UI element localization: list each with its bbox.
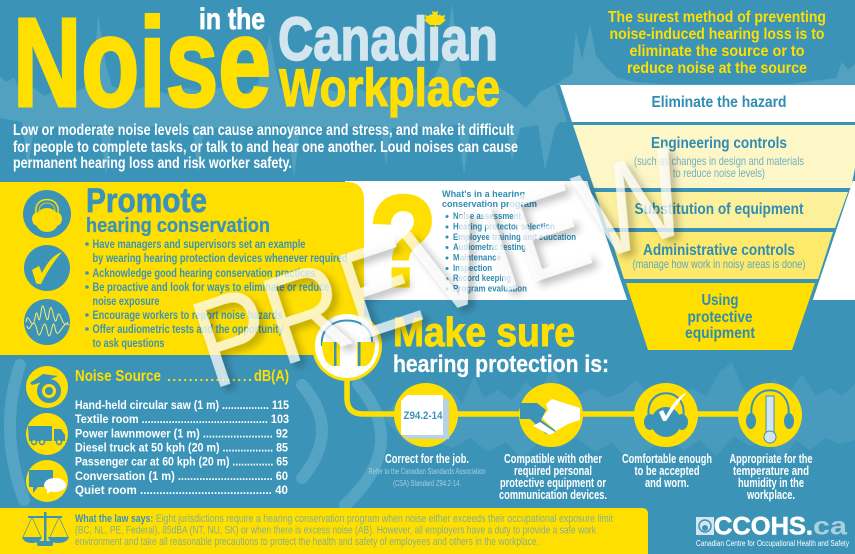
item: appropriate <box>730 383 812 502</box>
item: compatible: required personal <box>514 464 592 478</box>
text block: what's in a hearing conservation program: Employee training and education <box>453 232 576 243</box>
icon: head with earmuffs <box>23 190 71 238</box>
table header <box>75 368 289 385</box>
item: correct for the job <box>368 383 486 488</box>
panel: what the law says <box>0 508 648 554</box>
callout: surest method: reduce noise at the source <box>627 60 807 77</box>
callout: surest method: eliminate the source or to <box>630 43 804 60</box>
funnel level: engineering <box>573 125 855 188</box>
panel: promote hearing conservation <box>0 182 364 355</box>
bullet list: promote actions: Have managers and supervisors set an example <box>92 237 306 251</box>
text block: what's in a hearing conservation program: Hearing protector selection <box>453 222 555 232</box>
table header: Noise Source <box>75 368 161 385</box>
funnel level: engineering: Engineering controls <box>651 135 787 152</box>
intro paragraph: Low or moderate noise levels can cause annoyance and stress, and make it difficult <box>13 122 514 139</box>
callout: surest method: noise-induced hearing loss is to <box>610 26 824 43</box>
funnel level: substitution <box>595 192 848 228</box>
item: compatible: protective equipment or <box>500 476 606 490</box>
law text: What the law says: Eight jurisdictions require a hearing conservation program when noise either exceeds their occupational exposure limit <box>75 513 613 525</box>
text block: what's in a hearing conservation program: What's in a hearing <box>442 189 525 200</box>
title word: Canadian: Canadian <box>278 5 498 73</box>
text block: what's in a hearing conservation program <box>442 189 576 294</box>
item: correct for the job: Z94.2-14 <box>404 410 443 422</box>
icon: dump truck <box>26 413 68 455</box>
item: appropriate: humidity in the <box>738 476 804 490</box>
subheading: hearing protection is: hearing protection is: <box>393 351 609 378</box>
item: correct for the job: Refer to the Canadian Standards Association <box>368 467 486 476</box>
bullet list: promote actions: to ask questions <box>92 336 165 350</box>
table rows <box>75 399 290 497</box>
intro paragraph: for people to complete tasks, or talk to and hear one another. Loud noises can cause <box>13 139 518 156</box>
text block: what's in a hearing conservation program: Maintenance <box>453 252 501 264</box>
panel: funnel of controls <box>560 85 855 350</box>
table rows: Power lawnmower (1 m) ....................... 92 <box>75 428 288 440</box>
icon: noise waveform <box>24 299 70 345</box>
law text <box>75 513 613 548</box>
heading: Promote: Promote <box>86 182 207 220</box>
item: correct for the job: (CSA) Standard Z94.2-14. <box>393 479 461 488</box>
funnel level: protective equipment: protective <box>688 309 753 326</box>
funnel level: substitution: Substitution of equipment <box>634 201 804 218</box>
table header: ................ <box>167 368 252 384</box>
bullet list: promote actions: noise exposure <box>92 294 160 308</box>
heading: Make sure: Make sure <box>393 309 575 355</box>
table rows: Quiet room ......................................... 40 <box>75 484 288 497</box>
law text: (BC, NL, PE, Federal), 85dBA (NT, NU, SK) or when there is excess noise (AB). However, all employers have a duty to provide a safe work <box>75 524 596 536</box>
icon: question mark: ? <box>369 168 437 314</box>
panel: program white background <box>345 181 855 300</box>
funnel level: eliminate <box>560 85 855 122</box>
text block: what's in a hearing conservation program: conservation program <box>442 199 537 210</box>
text block: what's in a hearing conservation program: Inspection <box>453 263 492 274</box>
logo: CCOHS: CCOHS. <box>714 512 813 540</box>
title word: Workplace: Workplace <box>279 59 500 118</box>
title words: in the: in the <box>199 3 265 36</box>
table rows: Passenger car at 60 kph (20 m) .............. 65 <box>75 456 288 468</box>
text block: what's in a hearing conservation program: Record keeping <box>453 273 511 284</box>
item: comfortable <box>622 383 712 490</box>
table rows: Textile room .......................................... 103 <box>75 413 290 426</box>
item: appropriate: workplace. <box>746 488 795 502</box>
item: appropriate: Appropriate for the <box>730 452 812 466</box>
intro paragraph: permanent hearing loss and risk worker safety. <box>13 155 292 172</box>
item: compatible: communication devices. <box>499 488 607 502</box>
text block: what's in a hearing conservation program: Audiometric testing <box>453 242 526 253</box>
item: comfortable: to be accepted <box>634 464 700 478</box>
connector line <box>347 375 770 414</box>
table rows: Conversation (1 m) ............................... 60 <box>75 470 288 483</box>
law text: environment and take all reasonable precautions to protect the health and safety of employees and others in the workplace. <box>75 536 539 548</box>
item: compatible <box>499 383 607 502</box>
funnel level: administrative <box>609 232 833 279</box>
bullet list: promote actions <box>85 237 347 350</box>
funnel level: protective equipment <box>626 283 815 350</box>
funnel level: protective equipment: equipment <box>685 325 755 342</box>
icon: maple leaf <box>424 8 446 29</box>
callout: surest method: The surest method of preventing <box>608 9 826 26</box>
item: comfortable: Comfortable enough <box>622 452 712 466</box>
watermark: PREVIEW: PREVIEW <box>176 120 704 416</box>
table rows: Diesel truck at 50 kph (20 m) ................. 85 <box>75 442 288 454</box>
icon: check mark <box>24 245 70 291</box>
funnel level: eliminate: Eliminate the hazard <box>652 94 786 111</box>
icon: scales of justice <box>22 512 69 546</box>
item: appropriate: temperature and <box>733 464 809 478</box>
logo: CCOHS: ca <box>813 512 848 540</box>
text block: what's in a hearing conservation program: Program evaluation <box>453 284 527 294</box>
icon: speech bubbles <box>26 460 68 502</box>
logo: CCOHS <box>696 512 850 548</box>
icon: headset circle <box>312 311 382 381</box>
funnel level: administrative: Administrative controls <box>643 242 795 259</box>
item: correct for the job: Correct for the job. <box>385 452 469 466</box>
intro paragraph <box>13 122 518 172</box>
subheading: hearing conservation: hearing conservation <box>86 215 270 237</box>
text block: what's in a hearing conservation program: Noise assessment <box>453 211 522 222</box>
item: comfortable: and worn. <box>645 476 689 490</box>
icon: circular saw <box>26 366 68 408</box>
bullet list: promote actions: Encourage workers to report noise hazards <box>92 308 283 322</box>
table rows: Hand-held circular saw (1 m) ................ 115 <box>75 399 290 412</box>
panel: noise source table <box>26 366 290 502</box>
bullet list: promote actions: Offer audiometric tests and the opportunity <box>92 322 284 336</box>
funnel level: engineering: to reduce noise levels) <box>673 166 765 180</box>
funnel level: engineering: (such as changes in design and materials <box>634 154 804 168</box>
funnel level: protective equipment: Using <box>702 292 738 309</box>
item: compatible: Compatible with other <box>504 452 602 466</box>
bullet list: promote actions: Be proactive and look for ways to eliminate or reduce <box>92 280 330 294</box>
bullet list: promote actions: Acknowledge good hearing conservation practices <box>92 266 316 280</box>
funnel level: administrative: (manage how work in noisy areas is done) <box>632 257 806 271</box>
bullet list: promote actions: by wearing hearing protection devices whenever required <box>92 251 348 265</box>
callout: surest method <box>608 9 826 77</box>
table header: dB(A) <box>254 368 289 385</box>
title <box>13 0 500 133</box>
